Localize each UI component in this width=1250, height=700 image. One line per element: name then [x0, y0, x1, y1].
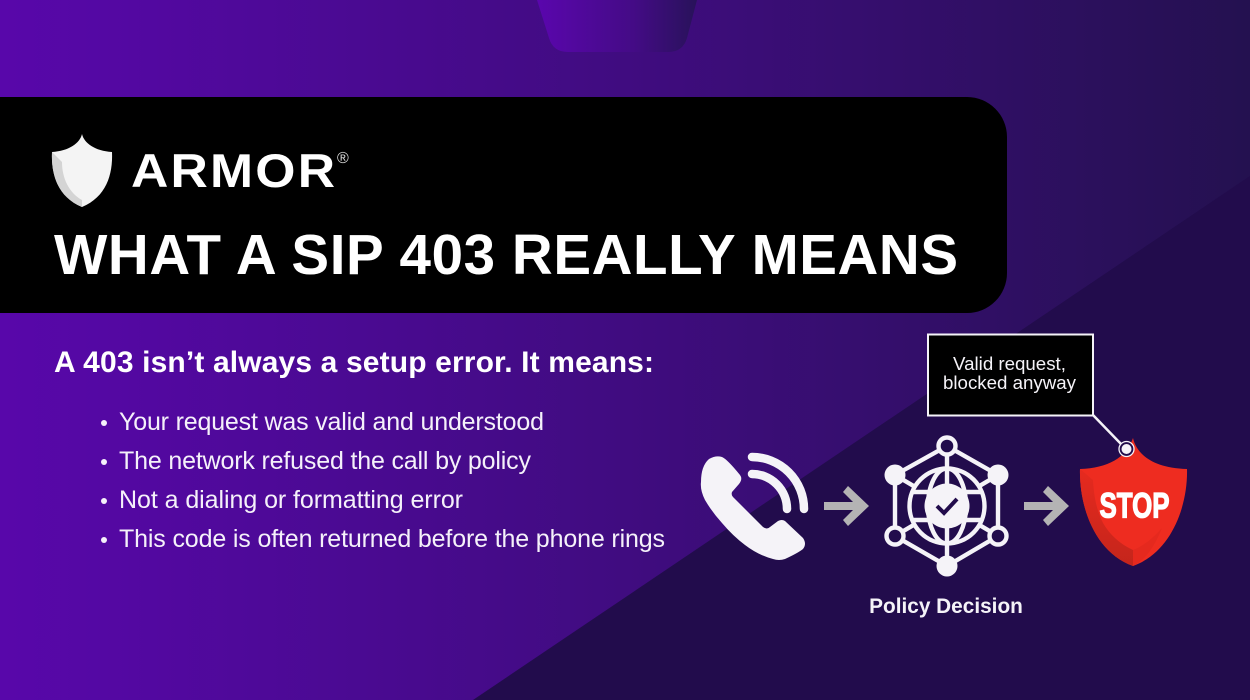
title: WHAT A SIP 403 REALLY MEANS — [54, 223, 958, 286]
stop text: STOP — [1100, 486, 1170, 525]
callout dot — [1119, 442, 1134, 456]
bullet 2: The network refused the call by policy — [119, 447, 532, 475]
header banner — [0, 97, 1007, 313]
callout text: Valid request, — [953, 353, 1066, 374]
arrow: phone to policy — [824, 486, 869, 526]
callout leader line — [1092, 414, 1122, 445]
policy decision label: Policy Decision — [869, 595, 1023, 618]
callout — [928, 334, 1134, 456]
bullet 3: Not a dialing or formatting error — [119, 486, 463, 514]
subheading: A 403 isn’t always a setup error. It means: — [54, 346, 654, 379]
registered mark: ® — [337, 150, 349, 167]
icon: stop shield — [1080, 438, 1187, 566]
icon: policy decision network globe — [884, 438, 1008, 576]
network nodes — [884, 438, 1008, 576]
banner background — [0, 97, 1007, 313]
bullet 1: Your request was valid and understood — [119, 408, 544, 436]
icon: armor shield logo — [52, 134, 112, 207]
bullet 4: This code is often returned before the phone rings — [119, 525, 665, 553]
callout text: blocked anyway — [943, 372, 1077, 393]
check disc — [924, 484, 970, 528]
callout box — [928, 334, 1093, 416]
bullet list — [101, 408, 665, 553]
logo wordmark: ARMOR — [131, 145, 337, 197]
top tab decoration — [537, 0, 697, 52]
dark diagonal background panel — [473, 176, 1250, 700]
arrow: policy to stop — [1024, 486, 1069, 526]
icon: phone — [701, 456, 805, 560]
